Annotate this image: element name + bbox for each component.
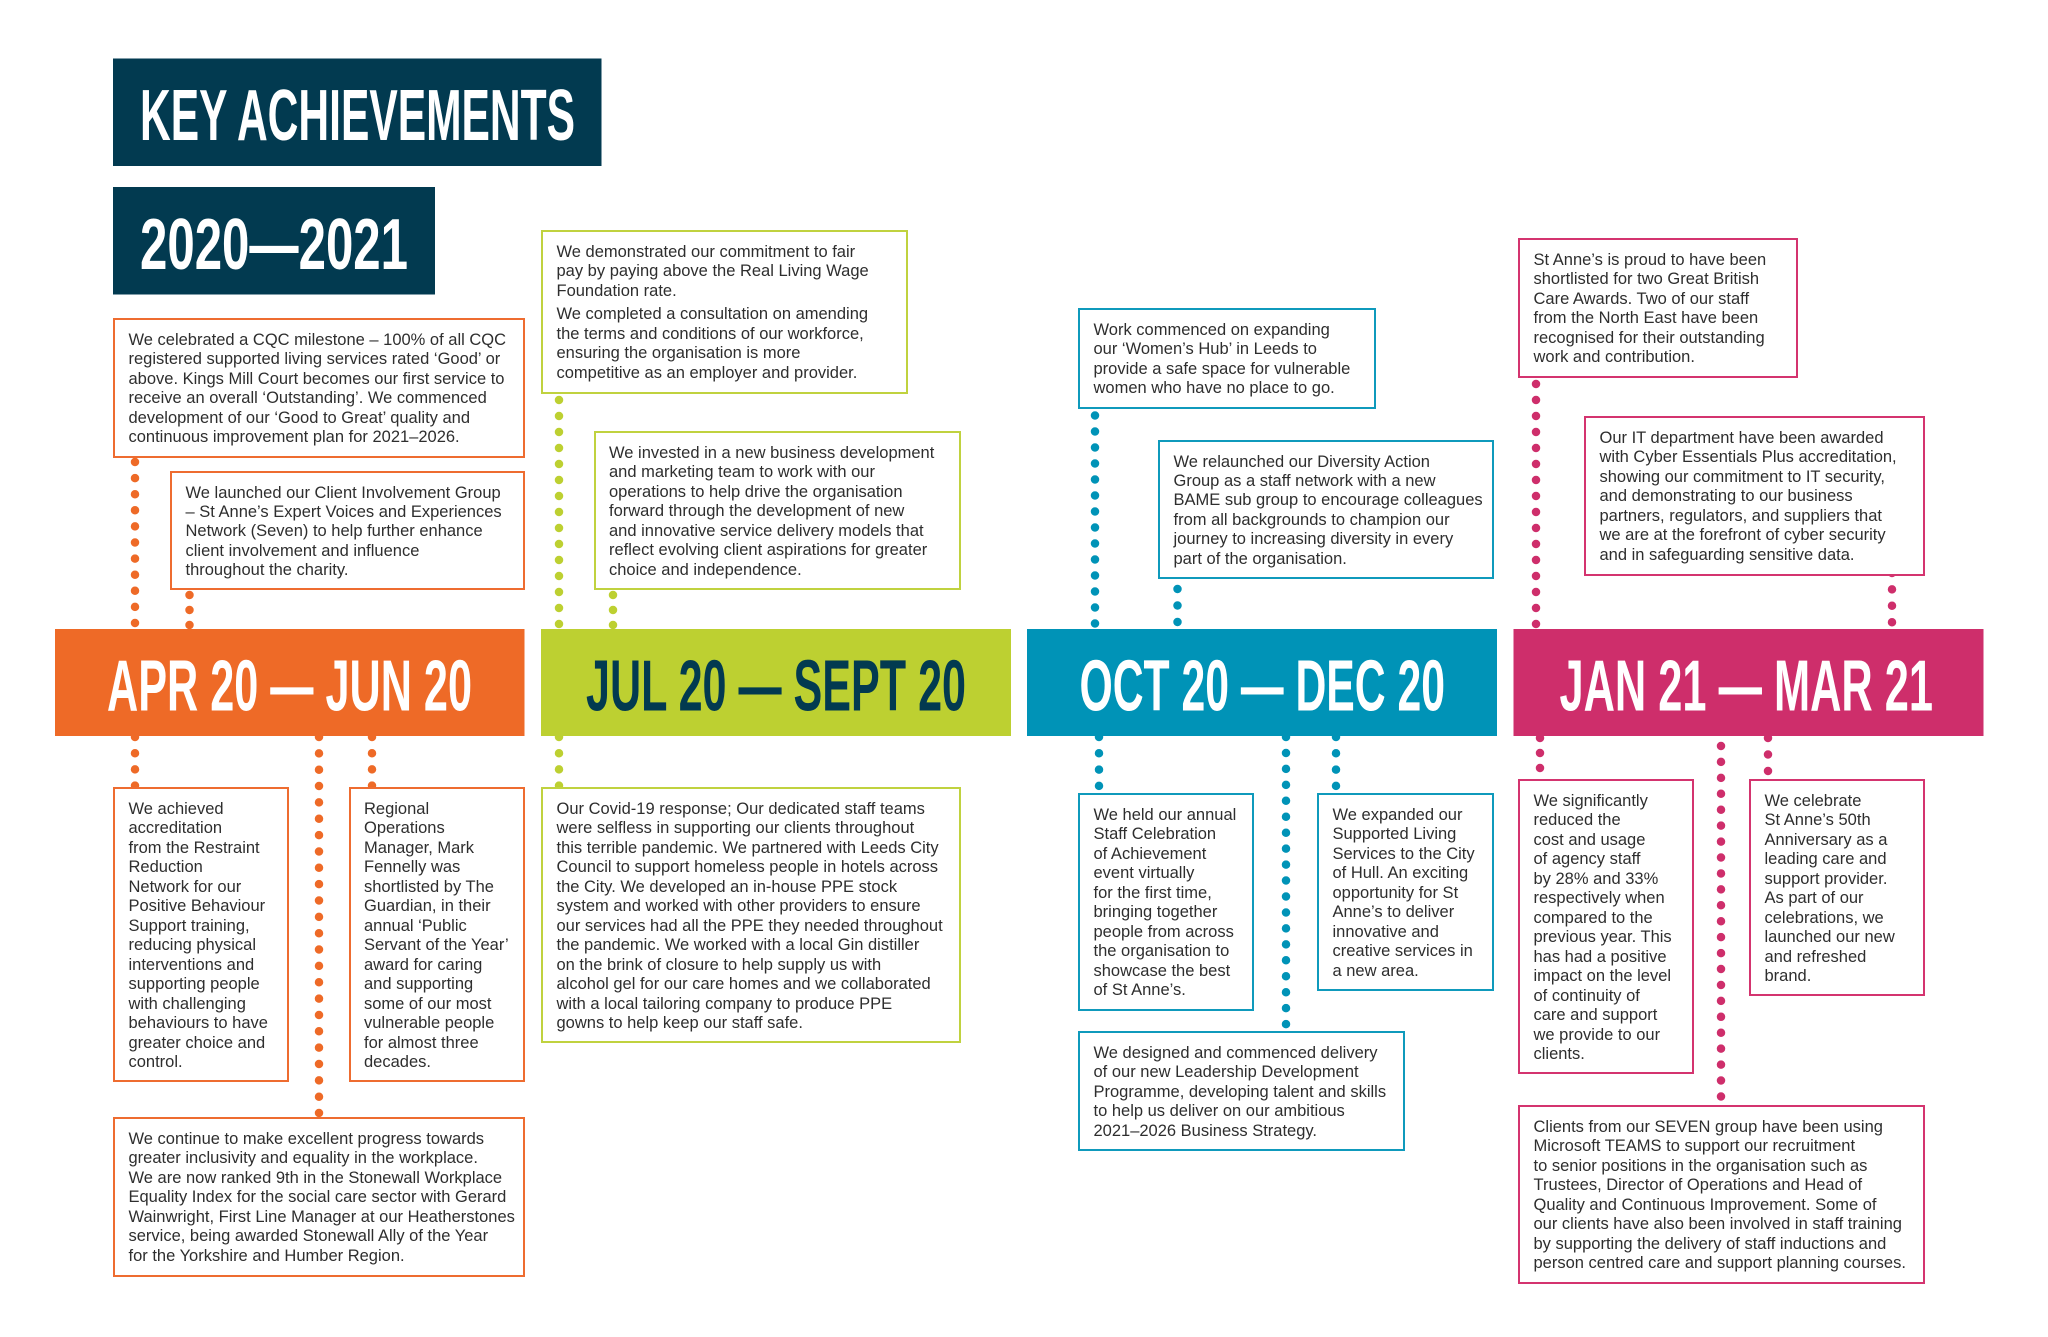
- dotted connector: Oct–Dec top 1: [1091, 416, 1099, 625]
- text box: Restraint Reduction accreditation: Support training,: [128, 917, 250, 935]
- text box: Cyber Essentials Plus: with Cyber Essentials Plus accreditation,: [1600, 448, 1897, 466]
- text box: Covid-19 response: Council to support homeless people in hotels across: [556, 858, 938, 876]
- text box: Mark Fennelly shortlisted: some of our most: [364, 995, 491, 1013]
- dotted connector: April–June top 2: [185, 595, 194, 626]
- text box: SEVEN group: by supporting the delivery of staff inductions and: [1534, 1235, 1886, 1253]
- text box: Mark Fennelly shortlisted: award for caring: [364, 956, 482, 974]
- timeline bar: April to June 2020: APR 20 — JUN 20: [107, 646, 472, 726]
- text box: Diversity Action Group: BAME sub group to encourage colleagues: [1174, 491, 1483, 509]
- text box: Mark Fennelly shortlisted: Manager, Mark: [364, 839, 474, 857]
- text box: SEVEN group: [1518, 1105, 1924, 1284]
- text box: Restraint Reduction accreditation: reducing physical: [128, 936, 256, 954]
- text box: agency staff reduction: respectively when: [1534, 889, 1665, 907]
- dotted connector: April–June bottom 1: [131, 737, 139, 786]
- text box: fair pay and consultation: the terms and conditions of our workforce,: [556, 325, 864, 343]
- text box: CQC milestone: above. Kings Mill Court becomes our first service to: [128, 370, 504, 388]
- text box: Leadership Development Programme: [1078, 1031, 1404, 1151]
- dotted connector: Oct–Dec bottom 2: [1282, 737, 1290, 1025]
- text box: Women's Hub: our ‘Women’s Hub’ in Leeds to: [1094, 340, 1317, 358]
- text box: business development team: and marketing team to work with our: [609, 463, 875, 481]
- text box: Women's Hub: Work commenced on expanding: [1094, 321, 1330, 339]
- text box: Covid-19 response: this terrible pandemic. We partnered with Leeds City: [556, 839, 939, 857]
- text box: Diversity Action Group: from all backgrounds to champion our: [1174, 511, 1450, 529]
- text box: Client Involvement Group: throughout the charity.: [186, 561, 348, 579]
- dotted connector: Oct–Dec bottom 1: [1095, 737, 1103, 787]
- text box: SEVEN group: Clients from our SEVEN group have been using: [1534, 1118, 1883, 1136]
- text box: Stonewall Equality Index: Equality Index for the social care sector with Gerard: [128, 1188, 506, 1206]
- title: Key Achievements: KEY ACHIEVEMENTS: [140, 76, 575, 156]
- text box: Women's Hub: [1078, 308, 1376, 409]
- text box: Staff Celebration of Achievement: people from across: [1094, 923, 1234, 941]
- text box: agency staff reduction: by 28% and 33%: [1534, 870, 1658, 888]
- text box: Diversity Action Group: journey to increasing diversity in every: [1174, 530, 1453, 548]
- text box: Restraint Reduction accreditation: control.: [128, 1053, 183, 1071]
- text box: Restraint Reduction accreditation: accreditation: [128, 819, 222, 837]
- dotted connector: Oct–Dec bottom 3: [1332, 737, 1340, 787]
- text box: Restraint Reduction accreditation: Reduction: [128, 858, 203, 876]
- title: Key Achievements: [113, 58, 602, 166]
- dotted connector: Jan–Mar bottom 2: [1717, 746, 1725, 1098]
- text box: Mark Fennelly shortlisted: annual ‘Public: [364, 917, 467, 935]
- text box: Cyber Essentials Plus: [1584, 416, 1924, 576]
- dotted connector: April–June bottom 2: [315, 737, 323, 1114]
- text box: Staff Celebration of Achievement: of St Anne’s.: [1094, 981, 1186, 999]
- dotted connector: April–June bottom 3: [368, 737, 376, 786]
- text box: Stonewall Equality Index: Wainwright, First Line Manager at our Heatherstones: [128, 1208, 515, 1226]
- text box: Staff Celebration of Achievement: the organisation to: [1094, 942, 1229, 960]
- text box: Great British Care Awards: St Anne’s is proud to have been: [1534, 251, 1766, 269]
- text box: Restraint Reduction accreditation: with challenging: [128, 995, 246, 1013]
- text box: 50th Anniversary: and refreshed: [1764, 948, 1866, 966]
- text box: Stonewall Equality Index: We continue to make excellent progress towards: [128, 1130, 484, 1148]
- text box: Stonewall Equality Index: We are now ranked 9th in the Stonewall Workplace: [128, 1169, 502, 1187]
- text box: Diversity Action Group: Group as a staff network with a new: [1174, 472, 1436, 490]
- text box: agency staff reduction: impact on the level: [1534, 967, 1671, 985]
- text box: agency staff reduction: of agency staff: [1534, 850, 1641, 868]
- text box: Covid-19 response: the City. We developed an in-house PPE stock: [556, 878, 897, 896]
- text box: Supported Living in Hull: creative services in: [1332, 942, 1473, 960]
- text box: business development team: and innovative service delivery models that: [609, 522, 924, 540]
- text box: 50th Anniversary: As part of our: [1764, 889, 1864, 907]
- text box: Cyber Essentials Plus: and demonstrating to our business: [1600, 487, 1853, 505]
- text box: Supported Living in Hull: Services to the City: [1332, 845, 1475, 863]
- text box: Staff Celebration of Achievement: event virtually: [1094, 864, 1194, 882]
- timeline bar: July to September 2020: JUL 20 — SEPT 20: [586, 646, 966, 726]
- text box: fair pay and consultation: We completed a consultation on amending: [556, 305, 868, 323]
- text box: Mark Fennelly shortlisted: Regional: [364, 800, 429, 818]
- heading: year 2020—2021: [113, 187, 435, 294]
- text box: Covid-19 response: gowns to help keep our staff safe.: [556, 1014, 803, 1032]
- timeline bar: October to December 2020: OCT 20 — DEC 20: [1080, 646, 1445, 726]
- text box: Leadership Development Programme: 2021–2026 Business Strategy.: [1094, 1122, 1317, 1140]
- text box: Great British Care Awards: Care Awards. Two of our staff: [1534, 290, 1749, 308]
- text box: Mark Fennelly shortlisted: Servant of the Year’: [364, 936, 509, 954]
- dotted connector: April–June top 1: [131, 462, 139, 625]
- text box: Covid-19 response: [541, 787, 961, 1043]
- text box: agency staff reduction: clients.: [1534, 1045, 1585, 1063]
- text box: fair pay and consultation: We demonstrated our commitment to fair: [556, 243, 855, 261]
- timeline bar: January to March 2021: [1514, 629, 1984, 736]
- text box: Leadership Development Programme: of our new Leadership Development: [1094, 1063, 1359, 1081]
- timeline bar: October to December 2020: [1027, 629, 1497, 736]
- text box: Supported Living in Hull: Supported Living: [1332, 825, 1456, 843]
- text box: 50th Anniversary: launched our new: [1764, 928, 1895, 946]
- text box: SEVEN group: Trustees, Director of Operations and Head of: [1534, 1176, 1862, 1194]
- text box: Restraint Reduction accreditation: from the Restraint: [128, 839, 260, 857]
- text box: Covid-19 response: alcohol gel for our care homes and we collaborated: [556, 975, 931, 993]
- text box: Cyber Essentials Plus: showing our commitment to IT security,: [1600, 468, 1885, 486]
- text box: Staff Celebration of Achievement: Staff Celebration: [1094, 825, 1216, 843]
- text box: SEVEN group: Quality and Continuous Improvement. Some of: [1534, 1196, 1877, 1214]
- text box: fair pay and consultation: pay by paying above the Real Living Wage: [556, 262, 869, 280]
- text box: SEVEN group: to senior positions in the organisation such as: [1534, 1157, 1867, 1175]
- text box: CQC milestone: development of our ‘Good to Great’ quality and: [128, 409, 470, 427]
- text box: CQC milestone: registered supported living services rated ‘Good’ or: [128, 350, 500, 368]
- text box: Supported Living in Hull: a new area.: [1332, 962, 1419, 980]
- dotted connector: July–Sept top 1: [555, 400, 563, 625]
- text box: CQC milestone: continuous improvement plan for 2021–2026.: [128, 428, 460, 446]
- text box: Diversity Action Group: [1158, 440, 1494, 578]
- text box: Diversity Action Group: part of the organisation.: [1174, 550, 1347, 568]
- text box: Restraint Reduction accreditation: supporting people: [128, 975, 260, 993]
- text box: Mark Fennelly shortlisted: shortlisted by The: [364, 878, 494, 896]
- text box: Cyber Essentials Plus: and in safeguarding sensitive data.: [1600, 546, 1855, 564]
- text box: business development team: reflect evolving client aspirations for greater: [609, 541, 927, 559]
- text box: business development team: choice and independence.: [609, 561, 802, 579]
- text box: Staff Celebration of Achievement: of Achievement: [1094, 845, 1206, 863]
- text box: Cyber Essentials Plus: partners, regulators, and suppliers that: [1600, 507, 1882, 525]
- text box: 50th Anniversary: brand.: [1764, 967, 1811, 985]
- dotted connector: Jan–Mar top 2: [1888, 573, 1896, 623]
- text box: Stonewall Equality Index: greater inclusivity and equality in the workplace.: [128, 1149, 478, 1167]
- text box: 50th Anniversary: support provider.: [1764, 870, 1887, 888]
- text box: 50th Anniversary: St Anne’s 50th: [1764, 811, 1871, 829]
- text box: Leadership Development Programme: Programme, developing talent and skills: [1094, 1083, 1386, 1101]
- text box: Women's Hub: women who have no place to go.: [1094, 379, 1335, 397]
- text box: Restraint Reduction accreditation: [113, 787, 289, 1082]
- timeline bar: April to June 2020: [55, 629, 524, 736]
- text box: business development team: We invested in a new business development: [609, 444, 934, 462]
- text box: Mark Fennelly shortlisted: Guardian, in their: [364, 897, 491, 915]
- text box: Supported Living in Hull: We expanded our: [1332, 806, 1462, 824]
- text box: Women's Hub: provide a safe space for vulnerable: [1094, 360, 1350, 378]
- text box: Restraint Reduction accreditation: interventions and: [128, 956, 254, 974]
- dotted connector: Jan–Mar bottom 3: [1764, 738, 1772, 772]
- text box: Client Involvement Group: client involvement and influence: [186, 542, 419, 560]
- text box: agency staff reduction: previous year. This: [1534, 928, 1672, 946]
- text box: Restraint Reduction accreditation: greater choice and: [128, 1034, 265, 1052]
- text box: agency staff reduction: of continuity of: [1534, 987, 1640, 1005]
- text box: fair pay and consultation: Foundation rate.: [556, 282, 677, 300]
- text box: 50th Anniversary: We celebrate: [1764, 792, 1861, 810]
- text box: 50th Anniversary: leading care and: [1764, 850, 1887, 868]
- text box: Client Involvement Group: Network (Seven) to help further enhance: [186, 522, 483, 540]
- text box: Mark Fennelly shortlisted: decades.: [364, 1053, 431, 1071]
- text box: CQC milestone: receive an overall ‘Outstanding’. We commenced: [128, 389, 487, 407]
- text box: agency staff reduction: has had a positive: [1534, 948, 1667, 966]
- text box: Staff Celebration of Achievement: showcase the best: [1094, 962, 1230, 980]
- text box: agency staff reduction: care and support: [1534, 1006, 1657, 1024]
- text box: Stonewall Equality Index: for the Yorkshire and Humber Region.: [128, 1247, 405, 1265]
- text box: Diversity Action Group: We relaunched our Diversity Action: [1174, 452, 1430, 470]
- text box: Mark Fennelly shortlisted: vulnerable people: [364, 1014, 494, 1032]
- text box: Supported Living in Hull: Anne’s to deliver: [1332, 903, 1454, 921]
- text box: Supported Living in Hull: innovative and: [1332, 923, 1439, 941]
- text box: 50th Anniversary: Anniversary as a: [1764, 831, 1887, 849]
- text box: SEVEN group: our clients have also been involved in staff training: [1534, 1215, 1902, 1233]
- text box: fair pay and consultation: competitive as an employer and provider.: [556, 364, 857, 382]
- text box: Mark Fennelly shortlisted: Fennelly was: [364, 858, 460, 876]
- text box: Covid-19 response: on the brink of closure to help supply us with: [556, 956, 881, 974]
- text box: Client Involvement Group: We launched our Client Involvement Group: [186, 484, 501, 502]
- dotted connector: July–Sept bottom: [555, 737, 563, 786]
- text box: Restraint Reduction accreditation: Positive Behaviour: [128, 897, 265, 915]
- text box: Cyber Essentials Plus: Our IT department have been awarded: [1600, 429, 1884, 447]
- text box: Covid-19 response: the pandemic. We worked with a local Gin distiller: [556, 936, 919, 954]
- text box: Supported Living in Hull: [1317, 793, 1494, 990]
- text box: Supported Living in Hull: opportunity for St: [1332, 884, 1458, 902]
- text box: Covid-19 response: with a local tailoring company to produce PPE: [556, 995, 892, 1013]
- text box: 50th Anniversary: celebrations, we: [1764, 909, 1884, 927]
- text box: agency staff reduction: cost and usage: [1534, 831, 1645, 849]
- text box: agency staff reduction: We significantly: [1534, 792, 1648, 810]
- text box: fair pay and consultation: ensuring the organisation is more: [556, 344, 800, 362]
- text box: Covid-19 response: Our Covid-19 response; Our dedicated staff teams: [556, 800, 925, 818]
- text box: Cyber Essentials Plus: we are at the forefront of cyber security: [1600, 526, 1886, 544]
- text box: Stonewall Equality Index: [113, 1117, 524, 1276]
- dotted connector: Jan–Mar top 1: [1532, 384, 1540, 626]
- text box: Staff Celebration of Achievement: bringing together: [1094, 903, 1217, 921]
- text box: Restraint Reduction accreditation: Network for our: [128, 878, 241, 896]
- text box: Great British Care Awards: shortlisted for two Great British: [1534, 270, 1759, 288]
- text box: Mark Fennelly shortlisted: and supporting: [364, 975, 473, 993]
- text box: Client Involvement Group: [170, 470, 524, 590]
- text box: Stonewall Equality Index: service, being awarded Stonewall Ally of the Year: [128, 1227, 488, 1245]
- text box: Client Involvement Group: – St Anne’s Expert Voices and Experiences: [186, 503, 502, 521]
- text box: 50th Anniversary: [1749, 779, 1924, 996]
- text box: Covid-19 response: our services had all the PPE they needed throughout: [556, 917, 943, 935]
- text box: business development team: [594, 431, 961, 590]
- text box: Staff Celebration of Achievement: We held our annual: [1094, 806, 1236, 824]
- text box: Mark Fennelly shortlisted: for almost three: [364, 1034, 479, 1052]
- text box: CQC milestone: [113, 318, 524, 458]
- text box: agency staff reduction: compared to the: [1534, 909, 1653, 927]
- text box: Covid-19 response: system and worked with other providers to ensure: [556, 897, 921, 915]
- text box: fair pay and consultation: [541, 230, 908, 394]
- dotted connector: July–Sept top 2: [609, 595, 617, 626]
- text box: SEVEN group: person centred care and support planning courses.: [1534, 1254, 1906, 1272]
- text box: business development team: operations to help drive the organisation: [609, 483, 903, 501]
- text box: Restraint Reduction accreditation: We achieved: [128, 800, 224, 818]
- text box: Staff Celebration of Achievement: for the first time,: [1094, 884, 1212, 902]
- text box: agency staff reduction: we provide to our: [1534, 1026, 1660, 1044]
- text box: Staff Celebration of Achievement: [1078, 793, 1254, 1010]
- text box: Great British Care Awards: [1518, 238, 1798, 378]
- text box: agency staff reduction: [1518, 779, 1694, 1074]
- text box: Mark Fennelly shortlisted: Operations: [364, 819, 445, 837]
- text box: Great British Care Awards: from the North East have been: [1534, 309, 1758, 327]
- text box: Great British Care Awards: recognised for their outstanding: [1534, 329, 1765, 347]
- text box: Leadership Development Programme: to help us deliver on our ambitious: [1094, 1102, 1345, 1120]
- text box: agency staff reduction: reduced the: [1534, 811, 1621, 829]
- text box: Covid-19 response: were selfless in supporting our clients throughout: [556, 819, 914, 837]
- text box: Restraint Reduction accreditation: behaviours to have: [128, 1014, 268, 1032]
- text box: Leadership Development Programme: We designed and commenced delivery: [1094, 1044, 1378, 1062]
- text box: Mark Fennelly shortlisted: [348, 787, 524, 1082]
- timeline bar: July to September 2020: [541, 629, 1011, 736]
- dotted connector: Jan–Mar bottom 1: [1536, 738, 1544, 769]
- text box: SEVEN group: Microsoft TEAMS to support our recruitment: [1534, 1137, 1855, 1155]
- dotted connector: Oct–Dec top 2: [1173, 589, 1182, 623]
- text box: Great British Care Awards: work and contribution.: [1534, 348, 1695, 366]
- heading: year 2020—2021: 2020—2021: [140, 205, 408, 285]
- text box: Supported Living in Hull: of Hull. An exciting: [1332, 864, 1468, 882]
- text box: business development team: forward through the development of new: [609, 502, 904, 520]
- text box: CQC milestone: We celebrated a CQC milestone – 100% of all CQC: [128, 331, 506, 349]
